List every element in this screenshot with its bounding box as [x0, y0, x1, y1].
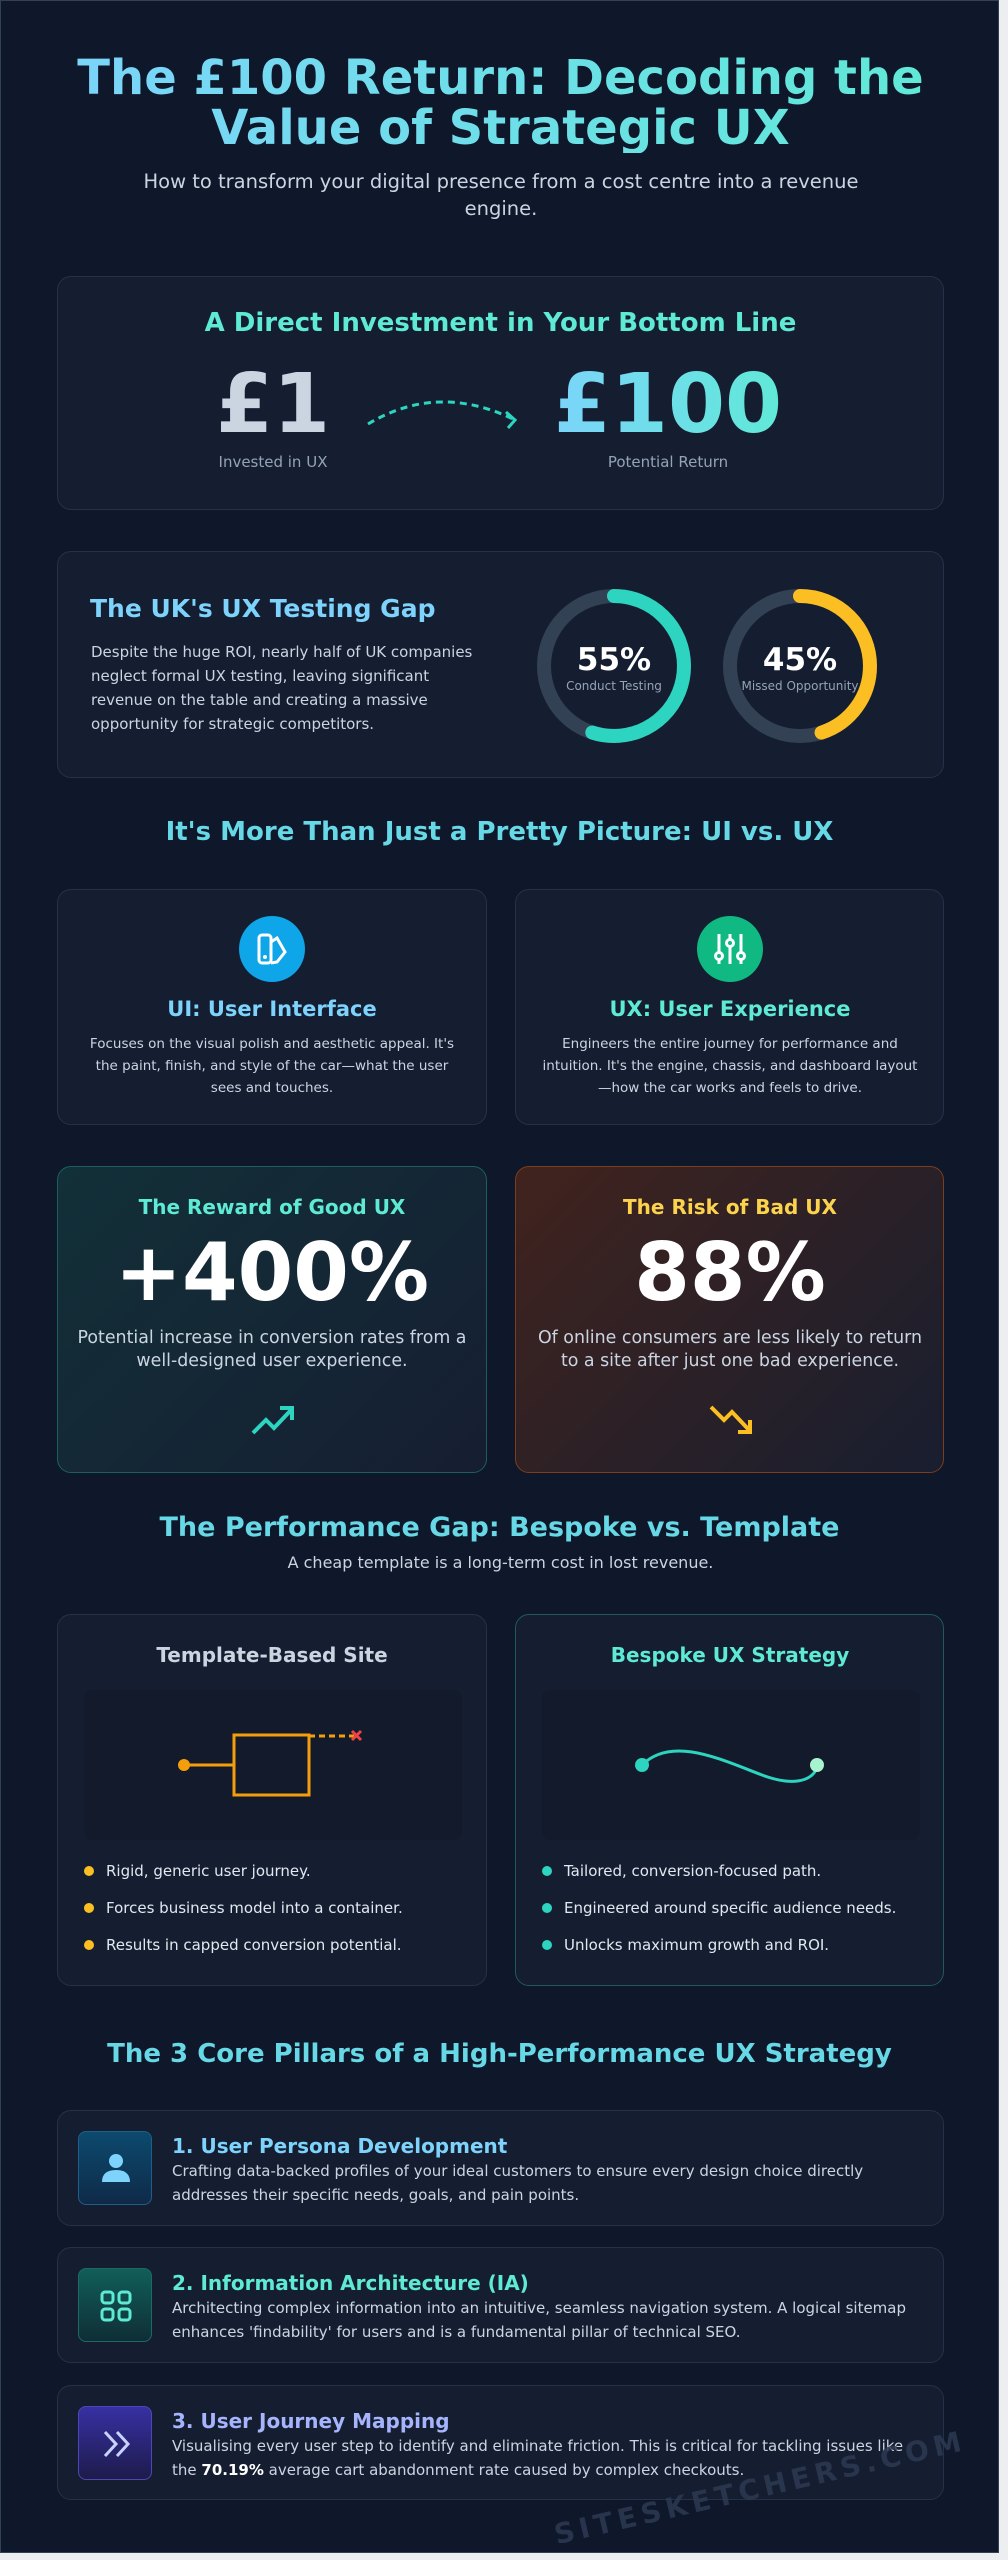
text: risk: Of online consumers are less likely to return to a site after just one bad experience.: [538, 1328, 922, 1371]
stat: +400%: +400%: [115, 1226, 429, 1319]
list: bespoke: [542, 1862, 896, 1954]
text: reward: Potential increase in conversion rates from a well-designed user experience.: [78, 1328, 466, 1371]
title: pillar 2: 2. Information Architecture (IA): [172, 2271, 529, 2295]
diagram: bespoke: [542, 1690, 920, 1840]
heading: performance gap: The Performance Gap: Bespoke vs. Template: [160, 1512, 839, 1543]
panel: risk: [515, 1166, 944, 1473]
heading: UI vs UX: It's More Than Just a Pretty Picture: UI vs. UX: [166, 817, 833, 847]
donut: 55%: [537, 589, 691, 743]
icon: chevrons: [78, 2406, 152, 2480]
list: template: Forces business model into a container.: [106, 1899, 403, 1917]
title: UX: UX: User Experience: [609, 997, 851, 1021]
title: template: Template-Based Site: [156, 1643, 388, 1667]
heading: pillars: The 3 Core Pillars of a High-Performance UX Strategy: [107, 2039, 892, 2069]
heading: testing gap: The UK's UX Testing Gap: [90, 594, 435, 623]
pillar 3: [57, 2385, 944, 2500]
donut: 45%: [723, 589, 877, 743]
list: bespoke: Engineered around specific audience needs.: [564, 1899, 896, 1917]
icon: palette: [239, 916, 305, 982]
watermark: SITESKETCHERS.COM: [551, 2424, 969, 2551]
title: pillar 3: 3. User Journey Mapping: [172, 2409, 450, 2433]
title: UI: UI: User Interface: [167, 997, 377, 1021]
text: pillar 2: Architecting complex information into an intuitive, seamless navigation system. A logical sitemap enhances 'findability' for users and is a fundamental pillar of technical SEO.: [172, 2299, 906, 2341]
list: template: Results in capped conversion potential.: [106, 1936, 402, 1954]
list: bespoke: Tailored, conversion-focused path.: [564, 1862, 821, 1880]
icon: trend down: [710, 1406, 752, 1434]
donut: 55%: 55%: [577, 642, 651, 678]
list: template: [84, 1862, 403, 1954]
subtitle: How to transform your digital presence from a cost centre into a revenue engine.: [144, 170, 858, 220]
panel: bespoke: [515, 1614, 944, 1986]
list: template: Rigid, generic user journey.: [106, 1862, 311, 1880]
panel: UX: [515, 889, 944, 1125]
text: testing gap: Despite the huge ROI, nearly half of UK companies neglect formal UX testing, leaving significant revenue on the table and creating a massive opportunity for strategic competitors.: [91, 643, 472, 733]
title: [1, 53, 1000, 153]
title: reward: The Reward of Good UX: [139, 1195, 405, 1219]
stat: £1: Invested in UX: [219, 453, 327, 471]
panel: template: [57, 1614, 487, 1986]
icon: trend up: [252, 1406, 294, 1434]
heading: direct investment: A Direct Investment in Your Bottom Line: [205, 308, 796, 338]
stat: £1: £1: [216, 357, 330, 452]
subheading: performance gap: A cheap template is a long-term cost in lost revenue.: [288, 1553, 713, 1572]
icon: user: [78, 2131, 152, 2205]
panel: investment: [57, 276, 944, 510]
title: The £100 Return: Decoding the: [77, 50, 924, 106]
text: UX: Engineers the entire journey for performance and intuition. It's the engine, chassis, and dashboard layout —how the car works and feels to drive.: [543, 1036, 917, 1096]
panel: UK testing gap: [57, 551, 944, 778]
panel: UI: [57, 889, 487, 1125]
donut: 45%: Missed Opportunity: [741, 679, 859, 693]
icon: sliders: [697, 916, 763, 982]
text: pillar 3: Visualising every user step to identify and eliminate friction. This is critical for tackling issues like the 70.19% average cart abandonment rate caused by complex checkouts.: [172, 2437, 903, 2479]
panel: reward: [57, 1166, 487, 1473]
text: UI: Focuses on the visual polish and aesthetic appeal. It's the paint, finish, and style of the car—what the user sees and touches.: [90, 1036, 454, 1096]
donut: 45%: 45%: [763, 642, 837, 678]
stat: 88%: 88%: [634, 1226, 826, 1319]
stat: £100: £100: [554, 357, 782, 452]
arrow: dashed curve: [367, 400, 517, 429]
pillar 1: [57, 2110, 944, 2226]
title: Value of Strategic UX: [211, 100, 790, 156]
title: risk: The Risk of Bad UX: [623, 1195, 837, 1219]
list: bespoke: Unlocks maximum growth and ROI.: [564, 1936, 829, 1954]
title: pillar 1: 1. User Persona Development: [172, 2134, 507, 2158]
title: bespoke: Bespoke UX Strategy: [611, 1643, 849, 1667]
donut: 55%: Conduct Testing: [566, 679, 662, 693]
text: pillar 1: Crafting data-backed profiles of your ideal customers to ensure every design choice directly addresses their specific needs, goals, and pain points.: [172, 2162, 863, 2204]
icon: grid: [78, 2268, 152, 2342]
diagram: template: [84, 1690, 462, 1840]
stat: £100: Potential Return: [608, 453, 728, 471]
pillar 2: [57, 2247, 944, 2363]
